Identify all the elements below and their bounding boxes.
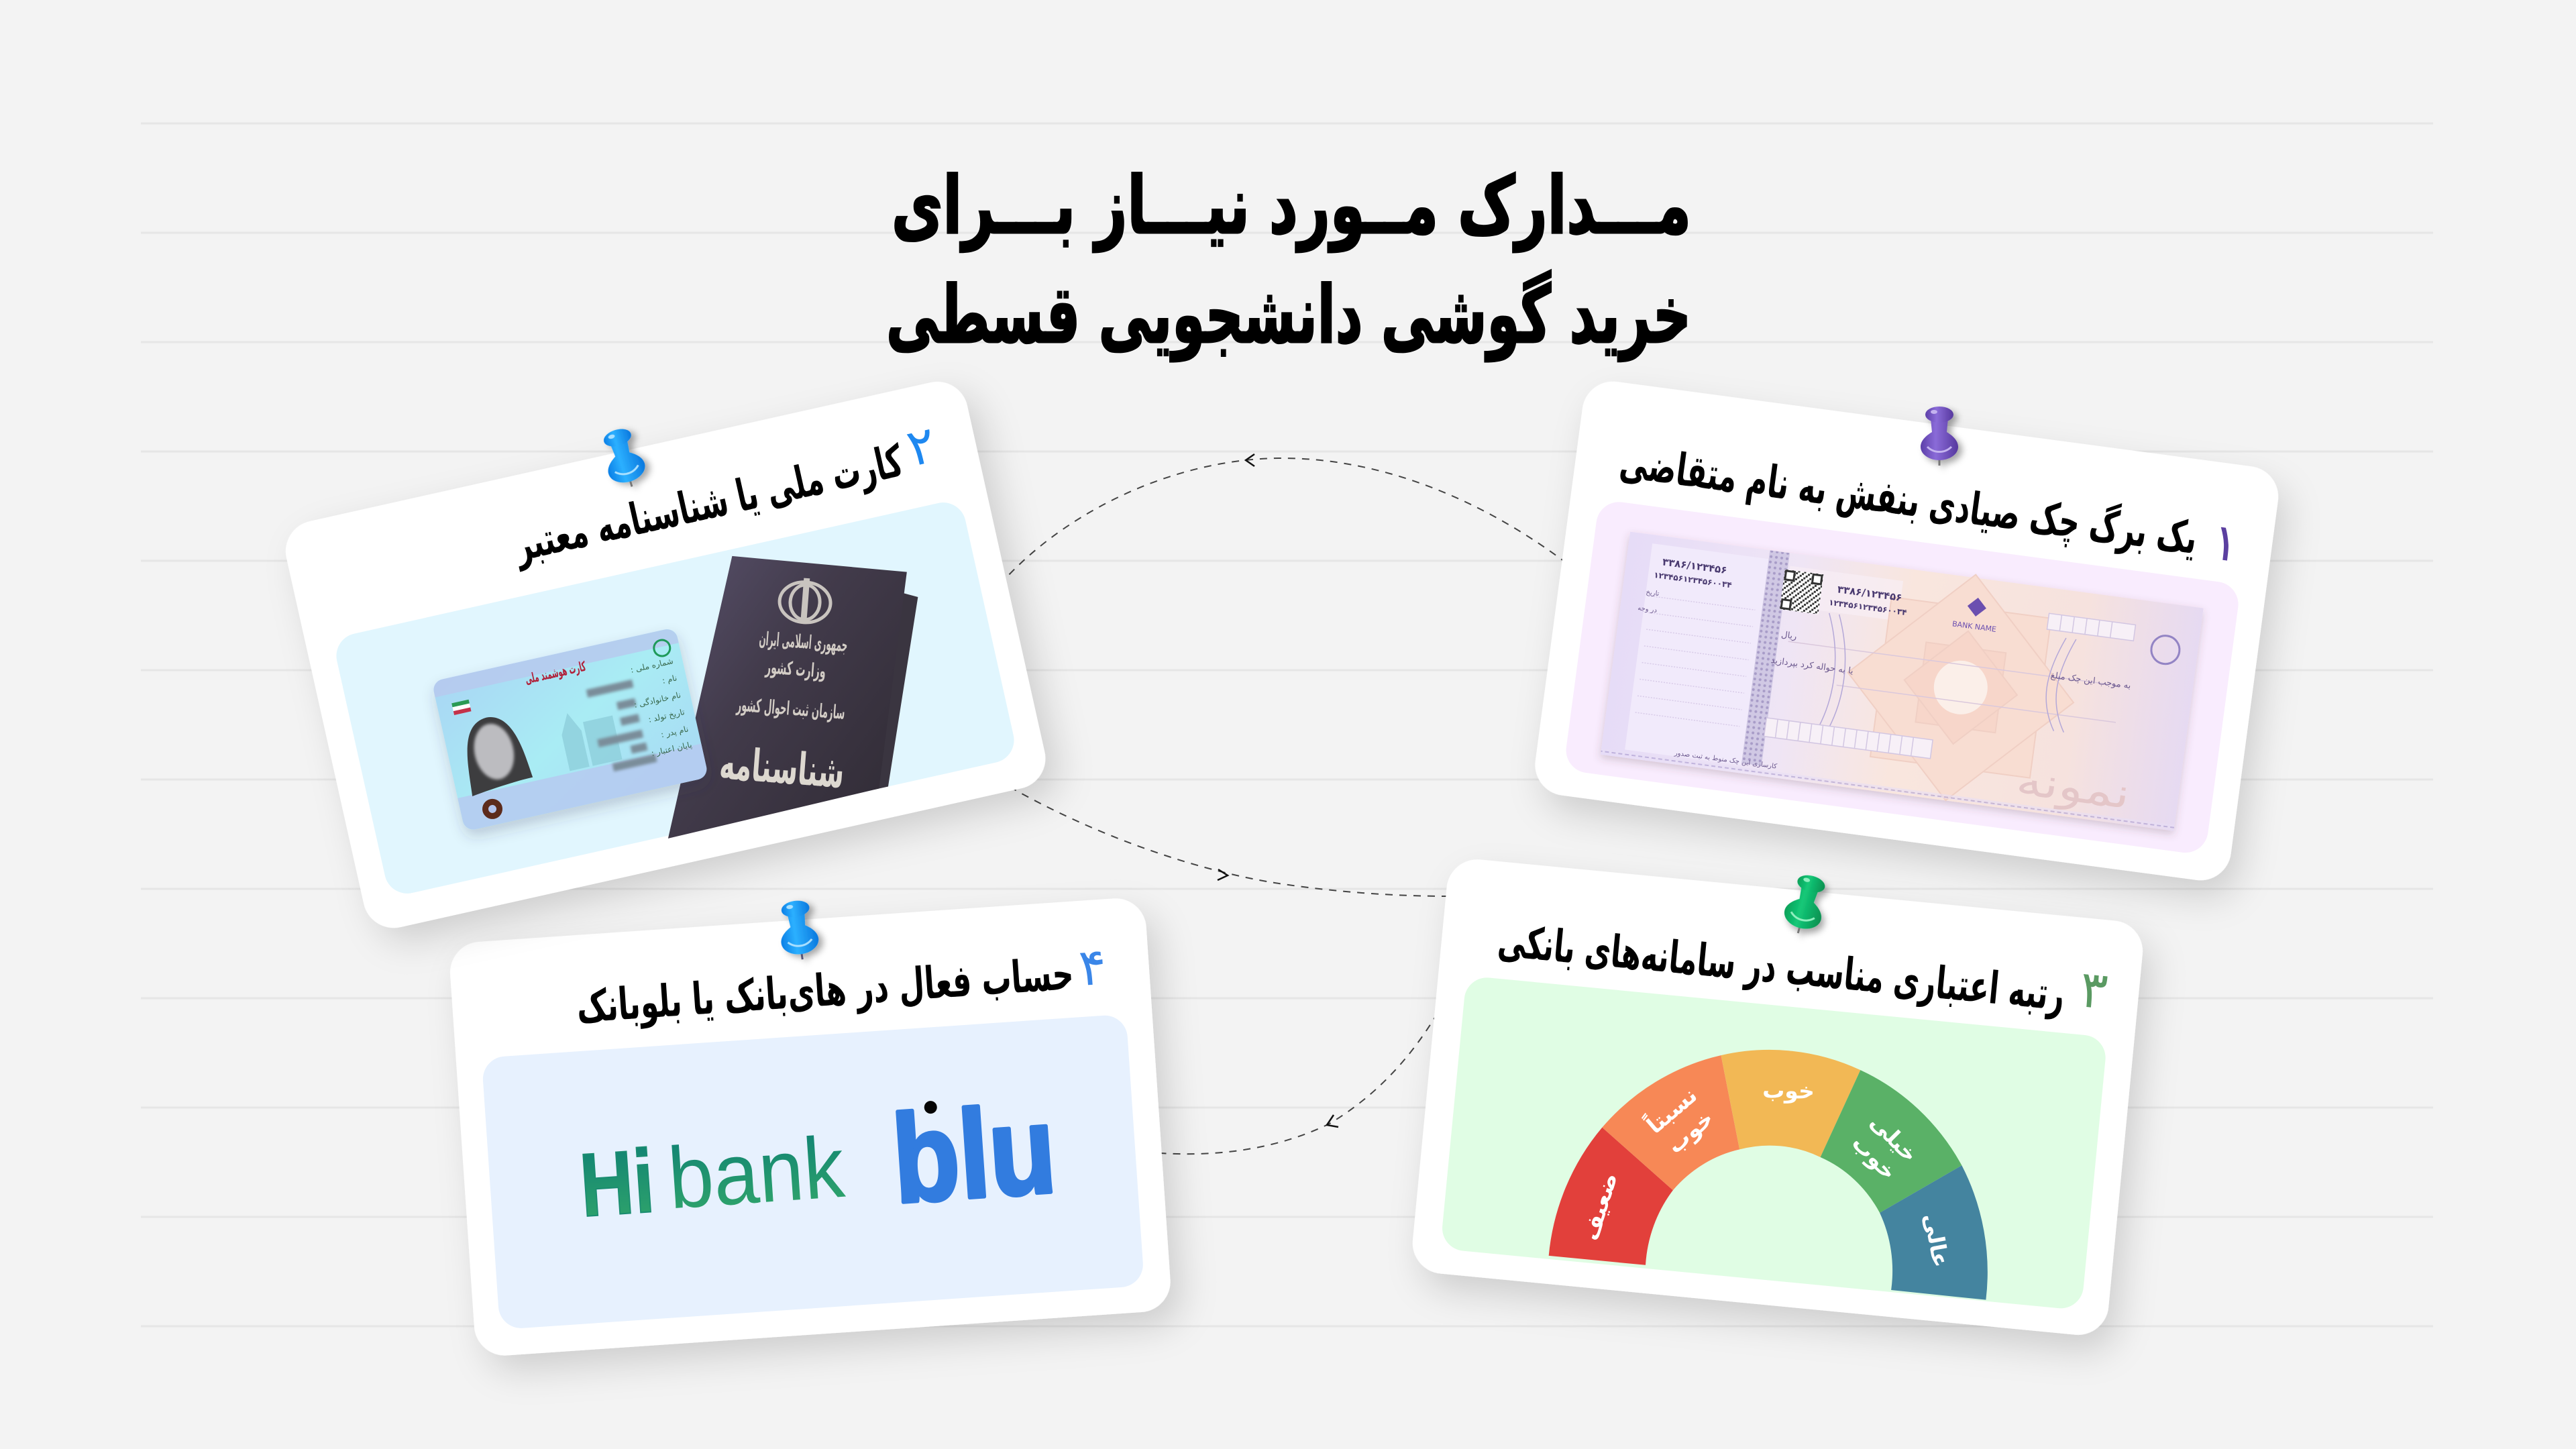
- QR code: [1780, 570, 1823, 614]
- logo: Hibank: bank: [665, 1118, 848, 1227]
- card 2 inner panel: [332, 498, 1018, 898]
- arrow: card 1 to card 2: [1006, 454, 1567, 578]
- national ID card: نام خانوادگی :: [633, 690, 682, 710]
- card 1 number: ۱: [2208, 511, 2243, 574]
- panel: card 2 national ID: [280, 376, 1051, 934]
- card 4 heading: حساب فعال در های‌بانک یا بلوبانک: [575, 948, 1075, 1034]
- sayad cheque image: کارسازی این چک منوط به ثبت صدور: [1673, 749, 1778, 771]
- sayad cheque image: در وجه: [1638, 604, 1658, 614]
- sayad cheque image: تاریخ: [1646, 589, 1660, 598]
- pin: card 2 blue: [597, 425, 650, 492]
- pin: card 3 green: [1780, 871, 1831, 938]
- background ruled lines: [141, 123, 2433, 1326]
- bank logo: [1951, 595, 2000, 634]
- panel: card 1 cheque: [1532, 378, 2282, 884]
- birth certificate booklet: سازمان ثبت احوال کشور: [735, 693, 846, 724]
- card 4 number: ۴: [1077, 936, 1108, 998]
- logo: blu: blu: [888, 1079, 1060, 1229]
- title: خرید گوشی دانشجویی قسطی: [886, 268, 1691, 362]
- card 1 inner panel: [1563, 499, 2241, 855]
- logo: Hibank: Hi: [577, 1131, 657, 1236]
- amount boxes: [1764, 578, 2135, 783]
- card 1 heading: یک برگ چک صیادی بنفش به نام متقاضی: [1617, 436, 2200, 565]
- bank logo: BANK NAME: [1951, 619, 1997, 634]
- sayad cheque image: نمونه: [2014, 755, 2133, 818]
- gauge chart: ضعیف: [1577, 1169, 1623, 1244]
- sayad cheque image: ریال: [1780, 630, 1797, 642]
- sayad cheque image: ۱۲۳۴۵۶۱۲۳۴۵۶۰۰۳۴: [1653, 570, 1733, 590]
- pin: card 1 purple: [1921, 407, 1958, 466]
- card 2 heading: کارت ملی یا شناسنامه معتبر: [508, 435, 908, 572]
- birth certificate booklet: وزارت کشور: [764, 655, 826, 682]
- national ID card: [431, 627, 708, 832]
- gauge chart: خیلی: [1865, 1109, 1923, 1167]
- panel: card 3 credit rating: [1410, 857, 2145, 1338]
- national ID card: نام :: [661, 673, 678, 686]
- arrow: card 2 to card 3: [1010, 787, 1449, 896]
- gauge chart: [1548, 1030, 2008, 1300]
- birth certificate booklet: جمهوری اسلامی ایران: [759, 627, 849, 656]
- card 2 number: ۲: [902, 414, 941, 478]
- sayad cheque image: ۳۳۸۶/۱۲۳۴۵۶: [1837, 583, 1902, 604]
- birth certificate booklet: [611, 519, 957, 839]
- sayad cheque image: یا به حواله کرد بپردازید: [1770, 655, 1854, 676]
- gauge chart: خوب: [1762, 1077, 1815, 1105]
- gauge chart: نسبتاً: [1640, 1079, 1702, 1139]
- card 3 inner panel: [1440, 975, 2108, 1310]
- sayad cheque image: به موجب این چک مبلغ: [2050, 670, 2131, 691]
- title: [886, 159, 1691, 362]
- card 3 number: ۳: [2078, 959, 2110, 1021]
- national ID card: پایان اعتبار :: [650, 740, 693, 759]
- card 3 heading: رتبه اعتباری مناسب در سامانه‌های بانکی: [1496, 915, 2067, 1021]
- title: مـــدارک مــورد نیـــاز بـــرای: [892, 159, 1691, 252]
- arrow: card 3 to card 4: [1161, 1013, 1438, 1154]
- sayad cheque image: ۱۲۳۴۵۶۱۲۳۴۵۶۰۰۳۴: [1828, 598, 1907, 617]
- gauge chart: خوب: [1662, 1105, 1719, 1159]
- sayad cheque image: [1601, 529, 2204, 831]
- pin: card 4 blue: [775, 898, 821, 962]
- national ID card: شماره ملی :: [630, 656, 674, 676]
- national ID card: تاریخ تولد :: [647, 707, 686, 725]
- panel: card 4 bank account: [448, 896, 1173, 1358]
- card 4 inner panel: [482, 1014, 1144, 1330]
- logo: Hibank: [577, 1118, 848, 1236]
- national ID card: کارت هوشمند ملی: [523, 658, 588, 687]
- national ID card: نام پدر :: [660, 724, 690, 740]
- sayad cheque image: ۳۳۸۶/۱۲۳۴۵۶: [1662, 555, 1728, 576]
- gauge chart: عالی: [1919, 1212, 1954, 1269]
- birth certificate booklet: شناسنامه: [718, 737, 846, 798]
- gauge chart: خوب: [1846, 1130, 1902, 1185]
